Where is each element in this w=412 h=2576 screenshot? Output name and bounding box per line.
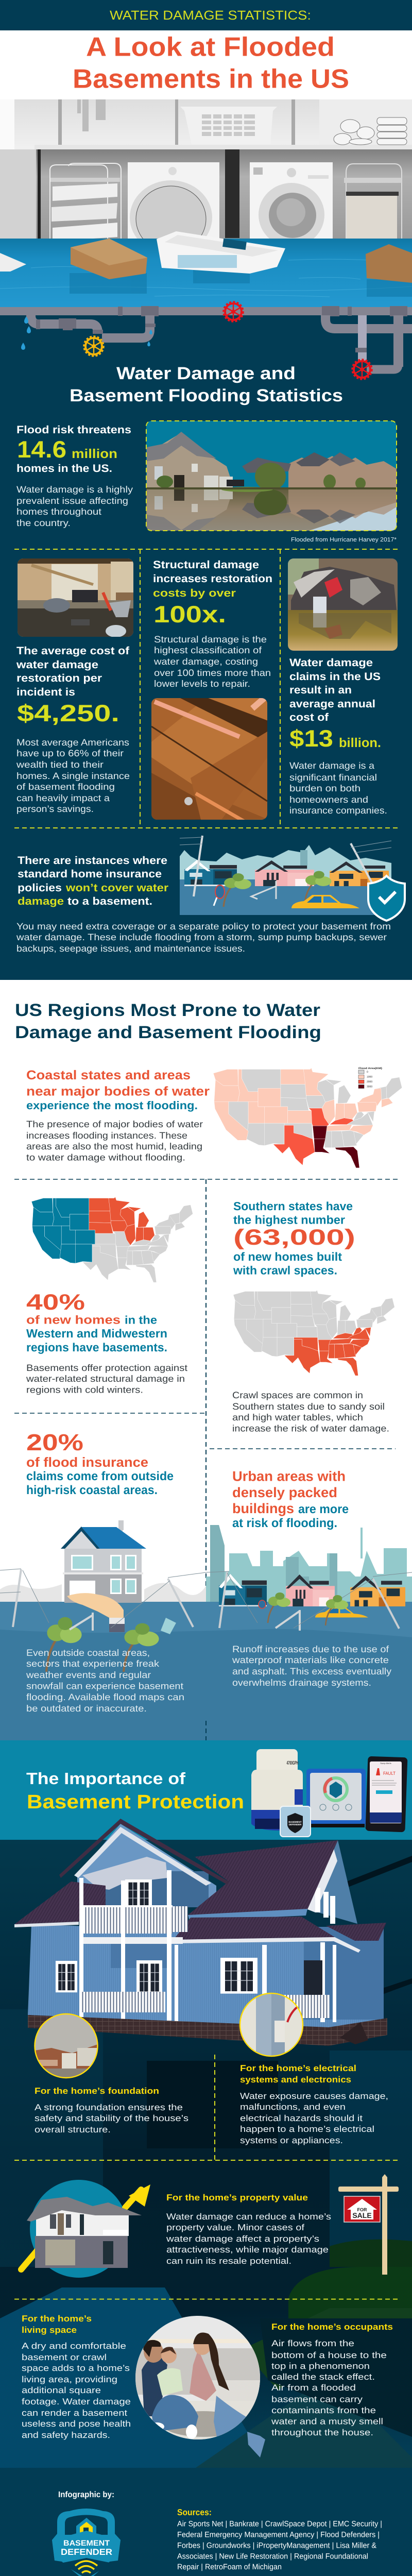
body text: have up to 66% of their <box>16 748 124 758</box>
stat column: structural damage <box>151 559 272 835</box>
body text: Most average Americans <box>16 737 129 748</box>
body text: regions with cold winters. <box>26 1385 143 1395</box>
body text: living area, providing <box>22 2375 117 2384</box>
heading: Water damage <box>289 657 373 669</box>
icon: for sale sign: SALE <box>352 2211 372 2219</box>
body text: safety and stability of the house’s <box>35 2113 188 2123</box>
body text: person’s savings. <box>16 804 94 814</box>
body text: footage. Water damage <box>22 2397 131 2406</box>
floating laundry basket <box>157 231 285 274</box>
coastal body text <box>26 1648 184 1714</box>
callout heading: to a basement. <box>67 895 152 907</box>
coastal body text: Even outside coastal areas, <box>26 1648 150 1658</box>
body text <box>232 1390 389 1434</box>
heading: For the home’s property value <box>166 2193 308 2202</box>
heading: Structural damage <box>153 559 259 571</box>
map legend: 3000 <box>367 1085 372 1088</box>
callout heading: standard home insurance <box>18 868 162 880</box>
stat column: average cost <box>16 558 133 814</box>
body text: malfunctions, and even <box>240 2102 346 2112</box>
body text: prevalent issue affecting <box>16 496 128 506</box>
body text: water damage, costing <box>153 656 258 667</box>
towels <box>334 117 407 145</box>
product photo: sump pump <box>251 1749 303 1831</box>
body text: additional square <box>22 2385 101 2395</box>
product photo: phone app: FAULT <box>383 1771 396 1776</box>
body text: Basements offer protection against <box>26 1363 187 1373</box>
body text: basement or crawl <box>22 2352 107 2362</box>
coastal body text: sectors that experience freak <box>26 1658 160 1669</box>
heading <box>240 2063 356 2084</box>
callout heading: won’t cover water <box>65 882 168 894</box>
section heading: statistics: Water Damage and <box>116 364 296 383</box>
body text: overall structure. <box>35 2125 111 2134</box>
icon: for sale sign: FOR <box>357 2207 367 2212</box>
heading: Southern states have <box>233 1199 353 1213</box>
gear: yellow valve <box>84 336 104 356</box>
regions heading: US Regions Most Prone to Water <box>15 1001 320 1020</box>
flood water <box>0 239 412 308</box>
heading: result in an <box>289 684 352 696</box>
body text: over 100 times more than <box>154 668 271 678</box>
body text <box>22 2341 131 2440</box>
body text: Structural damage is the <box>154 634 267 645</box>
shelf basket <box>180 107 277 145</box>
heading: of new homes built <box>233 1250 342 1263</box>
heading: water damage <box>16 659 98 671</box>
title: Basements in the US <box>73 64 349 94</box>
title panel <box>0 30 412 99</box>
body text: happen to a home’s electrical <box>240 2124 374 2134</box>
photo circle: electrical panel <box>240 1993 303 2056</box>
body text: Water damage is a highly <box>16 484 133 495</box>
body text: water-related structural damage in <box>26 1374 185 1384</box>
body text <box>240 2091 388 2145</box>
heading: claims in the US <box>289 671 381 683</box>
header band <box>0 0 412 30</box>
body text <box>153 634 271 689</box>
body text: wealth tied to their <box>16 759 104 770</box>
heading: increases restoration <box>153 573 272 585</box>
body text: to water damage without flooding. <box>26 1152 185 1162</box>
icon: for sale sign <box>338 2174 399 2275</box>
body text: Crawl spaces are common in <box>232 1390 363 1400</box>
body text <box>26 1363 187 1395</box>
urban body text: overwhelms drainage systems. <box>232 1677 371 1688</box>
body text: water damage affect a property’s <box>166 2234 319 2244</box>
body text <box>16 737 130 814</box>
stat: 14.6 million: 14.6 <box>17 436 66 463</box>
heading: cost of <box>289 711 329 723</box>
heading <box>289 657 381 723</box>
body text: homes throughout <box>16 506 101 517</box>
credit label: Infographic by: <box>58 2490 114 2499</box>
body text <box>166 2212 331 2266</box>
heading <box>16 645 130 698</box>
protection heading <box>26 1769 244 1813</box>
body text: A strong foundation ensures the <box>35 2103 183 2112</box>
occupants block <box>271 2322 393 2437</box>
sources heading: Sources: <box>177 2507 212 2517</box>
body text: top in a phenomenon <box>271 2361 370 2371</box>
body text: insurance companies. <box>289 805 387 816</box>
body text: and safety hazards. <box>22 2430 110 2440</box>
urban body text <box>232 1644 391 1688</box>
body text: water damage. These include flooding from a storm, sump pump backups, sewer <box>16 932 387 942</box>
stat number: 100x. <box>153 601 226 628</box>
photo: flooded neighborhood <box>146 421 397 544</box>
body text: Water damage can reduce a home’s <box>166 2212 331 2222</box>
section heading: statistics <box>70 364 343 405</box>
heading: systems and electronics <box>240 2075 351 2084</box>
urban areas block: are more <box>298 1502 349 1516</box>
heading: Western and Midwestern <box>26 1327 167 1340</box>
urban body text: and asphalt. This excess eventually <box>232 1666 391 1676</box>
body text: systems or appliances. <box>240 2136 343 2145</box>
heading: of flood insurance <box>26 1454 148 1470</box>
stat number: billion. <box>339 736 381 750</box>
body text <box>16 484 133 528</box>
heading: For the home’s <box>22 2314 92 2324</box>
body text: can ruin its resale potential. <box>166 2256 291 2266</box>
callout heading <box>18 855 168 907</box>
map: southern states <box>233 1290 394 1376</box>
illustration: modern house with rising arrow <box>21 2180 150 2278</box>
photo circle: cracked foundation <box>35 2013 98 2078</box>
foundation block <box>35 2013 188 2134</box>
heading: For the home’s occupants <box>271 2322 393 2332</box>
urban body text: waterproof materials like concrete <box>232 1655 389 1665</box>
urban areas block: at risk of flooding. <box>232 1516 337 1530</box>
body text: significant financial <box>289 772 377 783</box>
panel: dark room background <box>0 1840 412 2468</box>
product photo: phone app <box>365 1756 407 1832</box>
title <box>73 32 349 94</box>
heading: in the <box>125 1313 157 1326</box>
body text: water and a musty smell <box>271 2416 383 2427</box>
photo: flood debris pile <box>288 558 398 651</box>
flood insurance block <box>26 1429 174 1497</box>
body text: You may need extra coverage or a separate policy to protect your basement from <box>16 921 391 931</box>
body text: Water damage is a <box>289 760 375 771</box>
illustration: house in flood held by hand <box>0 1520 206 1672</box>
sources list: Forbes | Groundworks | iPropertyManagement | Lisa Miller & <box>177 2541 376 2550</box>
illustration: blue two-storey house <box>14 1819 387 2046</box>
body text <box>35 2103 188 2134</box>
map legend: 2000 <box>367 1080 372 1083</box>
body text: bottom of a house to the <box>271 2350 387 2360</box>
pipes <box>0 302 412 379</box>
logo: Basement Defender <box>52 2509 121 2576</box>
urban areas block: Urban areas with <box>232 1468 346 1484</box>
heading: restoration per <box>16 672 102 684</box>
heading <box>233 1199 355 1277</box>
body text: property value. Minor cases of <box>166 2223 304 2232</box>
product photo: wifi sensor: DEFENDER <box>289 1823 302 1826</box>
heading <box>26 1313 167 1354</box>
coastal body text: be outdated or inaccurate. <box>26 1703 147 1714</box>
heading: (63,000) <box>233 1225 355 1250</box>
stat column: annual cost <box>288 558 398 816</box>
urban areas block <box>232 1468 349 1530</box>
panel: regions section background <box>0 980 412 1602</box>
coastal body text: snowfall can experience basement <box>26 1681 183 1691</box>
body text: can render a basement <box>22 2408 127 2418</box>
body text: attractiveness, while major damage <box>166 2245 329 2255</box>
sources list: Repair | RetroFoam of Michigan <box>177 2563 282 2571</box>
heading: of new homes <box>26 1313 121 1326</box>
product photo: wifi sensor <box>280 1806 311 1837</box>
body text <box>26 1119 203 1162</box>
floating cardboard box <box>71 239 147 279</box>
heading: near major bodies of water <box>26 1084 210 1098</box>
washer <box>250 162 333 250</box>
map legend: 0 <box>367 1071 368 1074</box>
heading <box>26 1068 210 1112</box>
heading: The average cost of <box>16 645 130 657</box>
left rack with drawers <box>50 163 121 251</box>
heading: incident is <box>16 686 75 698</box>
body text: homeowners and <box>289 794 368 805</box>
body text: lower levels to repair. <box>154 679 250 689</box>
heading <box>26 1454 174 1497</box>
floating box right <box>366 244 412 283</box>
logo: Basement Defender: DEFENDER <box>61 2547 112 2557</box>
stat number: $4,250. <box>17 700 119 726</box>
body text: homes. A single instance <box>16 771 130 781</box>
body text: electrical hazards should it <box>240 2113 363 2123</box>
heading: costs by over <box>153 587 236 599</box>
heading: the highest number <box>233 1213 345 1226</box>
body text: A dry and comfortable <box>22 2341 126 2351</box>
product photo: control unit <box>306 1769 366 1827</box>
heading: Coastal states and areas <box>26 1068 191 1082</box>
property value block <box>21 2174 399 2278</box>
sources list: Federal Emergency Management Agency | Flood Defenders | <box>177 2531 380 2539</box>
body text: increases flooding instances. These <box>26 1130 187 1141</box>
footer <box>26 2490 382 2576</box>
heading <box>22 2314 92 2335</box>
heading: For the home’s electrical <box>240 2063 356 2073</box>
body text: called the stack effect. <box>271 2372 375 2382</box>
heading: with crawl spaces. <box>233 1263 337 1277</box>
body text: throughout the house. <box>271 2428 373 2437</box>
body text: increase the risk of water damage. <box>232 1423 389 1434</box>
stat: 14.6 million <box>16 424 133 528</box>
heading: claims come from outside <box>26 1469 174 1483</box>
callout heading: damage <box>18 895 64 907</box>
kicker: WATER DAMAGE STATISTICS: <box>110 8 311 23</box>
floating white tray <box>0 253 26 272</box>
body text: Water exposure causes damage, <box>240 2091 388 2101</box>
regions heading <box>15 1001 321 1042</box>
body text: areas are also the most humid, leading <box>26 1141 202 1151</box>
body text: burden on both <box>289 783 360 793</box>
stat: 14.6 million: homes in the US. <box>16 463 112 474</box>
heading: average annual <box>289 698 375 710</box>
flood water band <box>0 1602 412 1740</box>
body text: and high water tables, which <box>232 1412 363 1422</box>
protection heading: The Importance of <box>26 1769 185 1788</box>
map: western and midwestern states <box>31 1197 193 1282</box>
panel: protection banner <box>0 1740 412 1840</box>
logo: Basement Defender: BASEMENT <box>63 2539 110 2548</box>
sources list: Air Sports Net | Bankrate | CrawlSpace Depot | EMC Security | <box>177 2520 382 2529</box>
heading: living space <box>22 2325 77 2335</box>
body text <box>16 921 391 954</box>
photo: ruined basement <box>18 558 133 637</box>
heading <box>153 559 272 599</box>
body text: of basement flooding <box>16 782 115 792</box>
southern states block <box>232 1199 394 1434</box>
product photo: sump pump: 4700GPH <box>286 1760 299 1766</box>
west and midwest block <box>26 1197 193 1395</box>
stat: 14.6 million: Flood risk threatens <box>16 424 131 436</box>
protection heading: Basement Protection <box>27 1791 244 1813</box>
heading: high-risk coastal areas. <box>26 1483 158 1497</box>
living space block <box>22 2314 131 2440</box>
body text <box>289 760 387 816</box>
sources list: Associates | New Life Restoration | Regional Foundational <box>177 2552 368 2561</box>
illustration: flooded urban skyline <box>206 1525 412 1631</box>
urban areas block: buildings <box>232 1501 294 1516</box>
body text: Air from a flooded <box>271 2383 356 2393</box>
gear: red valve lower <box>352 360 372 379</box>
callout heading: policies <box>18 882 62 894</box>
coastal states block <box>26 1067 402 1168</box>
body text: Air flows from the <box>271 2338 354 2348</box>
body text: Southern states due to sandy soil <box>232 1401 385 1412</box>
map legend: 1000 <box>367 1076 372 1079</box>
body text: The presence of major bodies of water <box>26 1119 203 1129</box>
map legend: Flood Area(KM) <box>358 1067 382 1070</box>
sources list <box>177 2520 382 2571</box>
body text: useless and pose health <box>22 2419 131 2429</box>
stat number <box>289 725 381 752</box>
stat number: 40% <box>26 1290 85 1315</box>
body text: basement can carry <box>271 2395 363 2404</box>
section heading: statistics: Basement Flooding Statistics <box>70 386 343 405</box>
body text: contaminants from the <box>271 2405 376 2415</box>
photo circle: family on the floor <box>135 2316 265 2460</box>
hero photo: flooded laundry room <box>0 99 412 379</box>
dryer <box>128 162 219 255</box>
heading: regions have basements. <box>26 1341 167 1354</box>
illustration: flooded street <box>180 836 391 915</box>
body text: space adds to a home’s <box>22 2363 130 2373</box>
body text <box>271 2338 387 2437</box>
body text: the country. <box>16 518 71 528</box>
product photo: phone app: Sump Alerts <box>380 1762 391 1765</box>
callout heading: There are instances where <box>18 855 167 867</box>
body text: backups, seepage issues, and maintenance issues. <box>16 943 245 954</box>
coastal body text: flooding. Available flood maps can <box>26 1692 184 1702</box>
body text: highest classification of <box>154 645 262 655</box>
map: flood area by state <box>213 1068 402 1168</box>
urban body text: Runoff increases due to the use of <box>232 1644 389 1654</box>
coastal body text: weather events and regular <box>26 1670 151 1680</box>
heading: experience the most flooding. <box>26 1099 198 1112</box>
photo caption: Flooded from Hurricane Harvey 2017* <box>291 537 397 543</box>
electrical block <box>240 1993 388 2145</box>
urban areas block: densely packed <box>232 1485 337 1500</box>
photo: wood joists and pipe <box>151 698 267 820</box>
icon: shield with check <box>368 876 405 921</box>
stat: 14.6 million: million <box>72 447 117 461</box>
regions heading: Damage and Basement Flooding <box>15 1023 321 1042</box>
body text: can heavily impact a <box>16 793 110 803</box>
map legend <box>358 1067 382 1088</box>
title: A Look at Flooded <box>86 32 335 62</box>
insurance callout <box>16 836 405 954</box>
stat number: $13 <box>289 725 333 752</box>
stat number: 20% <box>26 1429 83 1455</box>
heading: For the home’s foundation <box>35 2086 159 2096</box>
right rack with hamper <box>344 164 402 247</box>
product photo: wifi sensor: BASEMENT <box>288 1821 302 1823</box>
gear: red valve <box>224 302 243 321</box>
